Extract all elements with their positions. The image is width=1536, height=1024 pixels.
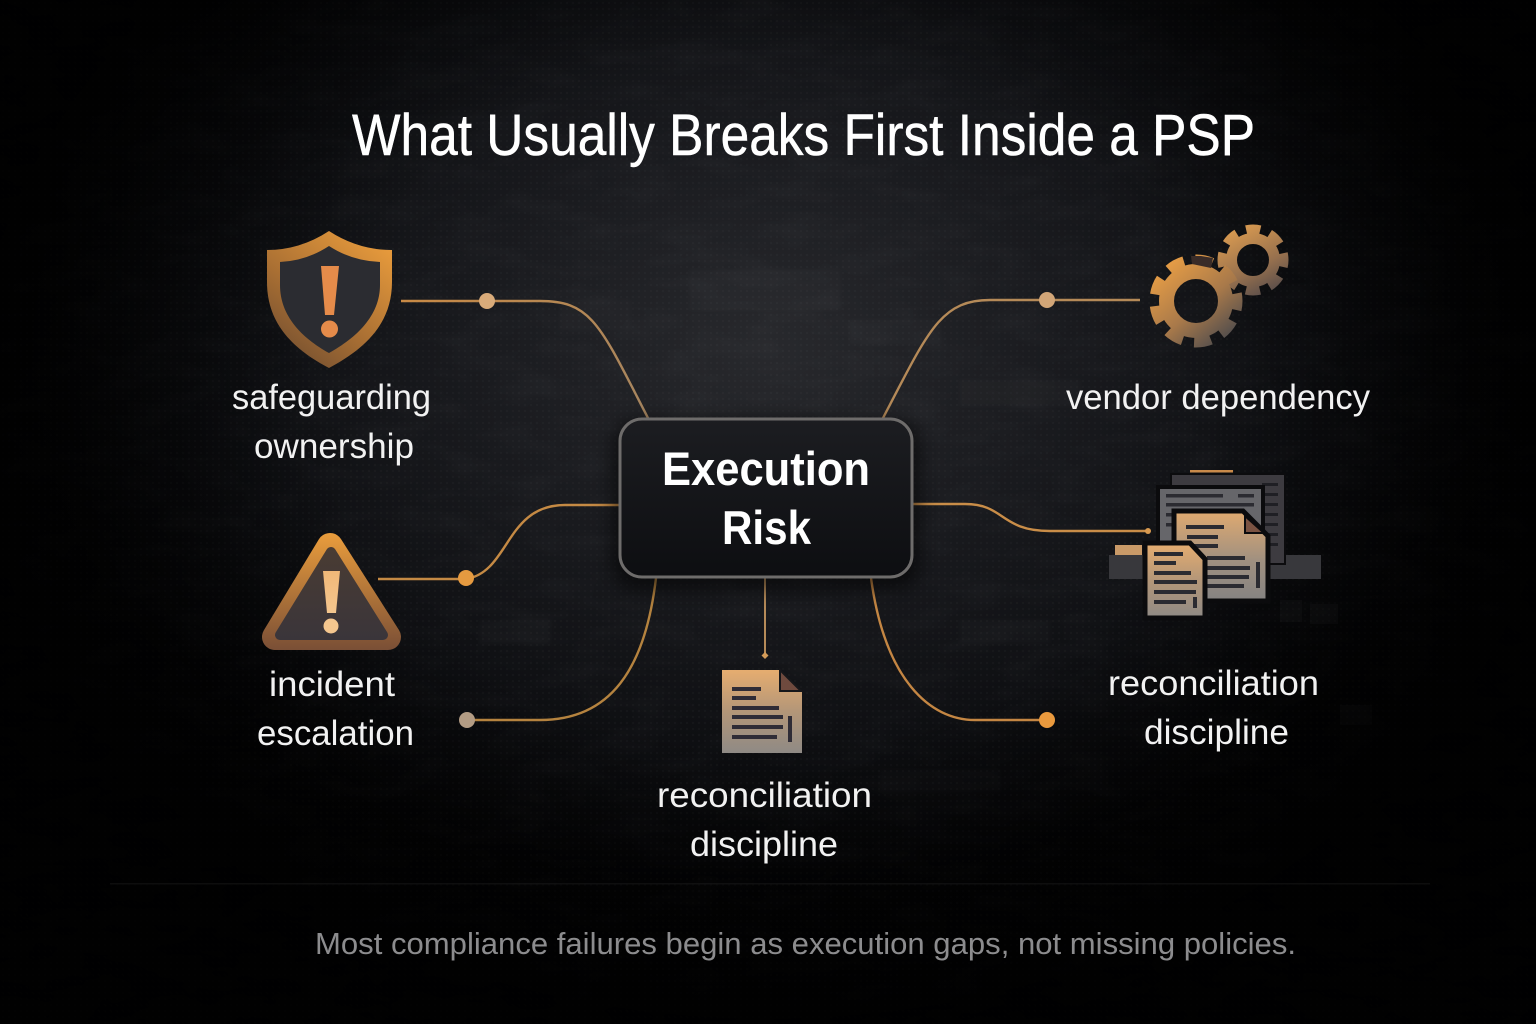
middle document [1158, 487, 1263, 561]
card heading line 1: Execution [662, 442, 870, 495]
front large document [1174, 511, 1268, 601]
folder base [1109, 545, 1321, 579]
footer note: Most compliance failures begin as execution gaps, not missing policies. [315, 926, 1296, 961]
title: What Usually Breaks First Inside a PSP [352, 103, 1255, 168]
label: vendor dependency: vendor dependency [1066, 378, 1370, 417]
connector: vendor dependency [883, 292, 1140, 418]
label: safeguarding ownership: safeguarding [232, 378, 431, 417]
icon: warning triangle [275, 546, 388, 637]
label: reconciliation discipline right: discipline [1144, 713, 1289, 752]
connector: safeguarding ownership [401, 293, 648, 418]
label: incident escalation: incident [269, 665, 395, 704]
label: reconciliation discipline centre [657, 776, 872, 864]
label: reconciliation discipline right: reconciliation [1108, 664, 1319, 703]
label: reconciliation discipline centre: discipline [690, 825, 838, 864]
icon: gears [1155, 230, 1284, 342]
small gear [1222, 230, 1284, 290]
label: reconciliation discipline centre: reconciliation [657, 776, 872, 815]
connector: incident escalation [378, 505, 620, 586]
back document [1171, 474, 1285, 564]
large gear [1155, 260, 1237, 342]
connector: reconciliation discipline right [913, 504, 1151, 534]
connector: lower right [871, 578, 1055, 728]
card heading line 2: Risk [722, 501, 812, 554]
icon: shield [267, 231, 392, 368]
label: reconciliation discipline right [1108, 664, 1319, 752]
label: safeguarding ownership: ownership [254, 427, 414, 466]
label: incident escalation [257, 665, 414, 753]
label: incident escalation: escalation [257, 714, 414, 753]
label: safeguarding ownership [232, 378, 431, 466]
connector: centre document [762, 578, 768, 659]
icon: document stack [1109, 470, 1321, 618]
front small document [1145, 543, 1205, 618]
connector: lower left [459, 578, 656, 728]
icon: document centre [722, 670, 802, 753]
central card: Execution Risk [612, 419, 920, 590]
